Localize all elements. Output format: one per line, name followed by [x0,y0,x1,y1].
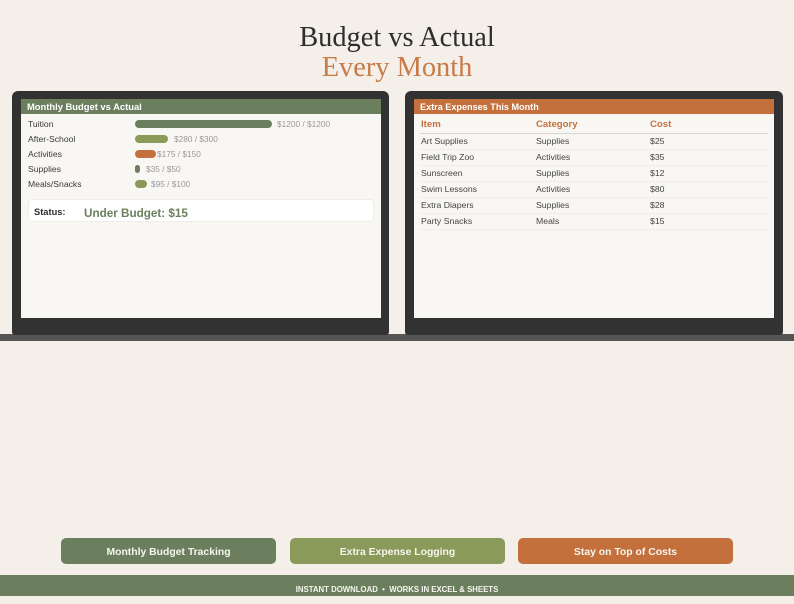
label: tuition: Tuition [28,119,53,129]
heading: extra expenses this month [414,99,774,114]
row: sunscreen: Sunscreen [421,168,463,178]
label: meals/snacks: Meals/Snacks [28,179,82,189]
row: swim lessons [421,184,664,194]
heading: monthly budget vs actual: Monthly Budget vs Actual [27,101,142,112]
panel: monthly budget laptop [12,91,389,335]
row: art supplies: Art Supplies [421,136,468,146]
row: party snacks: $15 [650,216,664,226]
panel: monthly budget screen [21,99,381,318]
row: sunscreen: Supplies [536,168,569,178]
row: swim lessons: Swim Lessons [421,184,477,194]
label: activities: Activities [28,149,62,159]
row: extra diapers: Extra Diapers [421,200,474,210]
heading: extra expenses this month: Extra Expenses This Month [420,102,539,112]
row: art supplies: Supplies [536,136,569,146]
row: extra diapers: $28 [650,200,664,210]
value: activities: $175 / $150 [157,149,201,159]
row: extra diapers [421,200,664,210]
row: field trip zoo: $35 [650,152,664,162]
footer band [0,575,794,596]
value: meals/snacks: $95 / $100 [151,179,190,189]
shelf bar [0,334,794,341]
row: art supplies: $25 [650,136,664,146]
row: party snacks: Meals [536,216,559,226]
bar: after-school [135,135,168,143]
row: field trip zoo: Field Trip Zoo [421,152,474,162]
button: monthly budget tracking: Monthly Budget Tracking [106,547,231,558]
bar: activities [135,150,156,158]
button: stay on top of costs [518,538,733,564]
row: sunscreen [421,168,664,178]
bar: tuition [135,120,272,128]
panel: extra expenses screen [414,99,774,318]
row: swim lessons: $80 [650,184,664,194]
bar: meals/snacks [135,180,147,188]
table header: item: Item [421,119,441,130]
table header: cost: Cost [650,119,671,130]
heading: monthly budget vs actual [21,99,381,114]
status value: Under Budget: $15 [84,207,188,220]
bar: supplies [135,165,140,173]
value: tuition: $1200 / $1200 [277,119,330,129]
row: field trip zoo [421,152,664,162]
footer band: INSTANT DOWNLOAD • WORKS IN EXCEL & SHEETS [296,585,498,594]
title line 1: Budget vs Actual [299,22,495,53]
label: after-school: After-School [28,134,75,144]
row: party snacks [421,216,664,226]
row: art supplies [421,136,664,146]
value: after-school: $280 / $300 [174,134,218,144]
button: monthly budget tracking [61,538,276,564]
button: extra expense logging [290,538,505,564]
button: extra expense logging: Extra Expense Logging [340,547,455,558]
row: swim lessons: Activities [536,184,570,194]
label: supplies: Supplies [28,164,61,174]
row: sunscreen: $12 [650,168,664,178]
row: party snacks: Party Snacks [421,216,472,226]
row: extra diapers: Supplies [536,200,569,210]
row: field trip zoo: Activities [536,152,570,162]
status box [28,199,374,222]
panel: extra expenses laptop [405,91,783,335]
table header: category: Category [536,119,578,130]
status label: Status: [34,207,66,217]
title line 2: Every Month [322,52,472,83]
button: stay on top of costs: Stay on Top of Costs [574,547,677,558]
value: supplies: $35 / $50 [146,164,181,174]
